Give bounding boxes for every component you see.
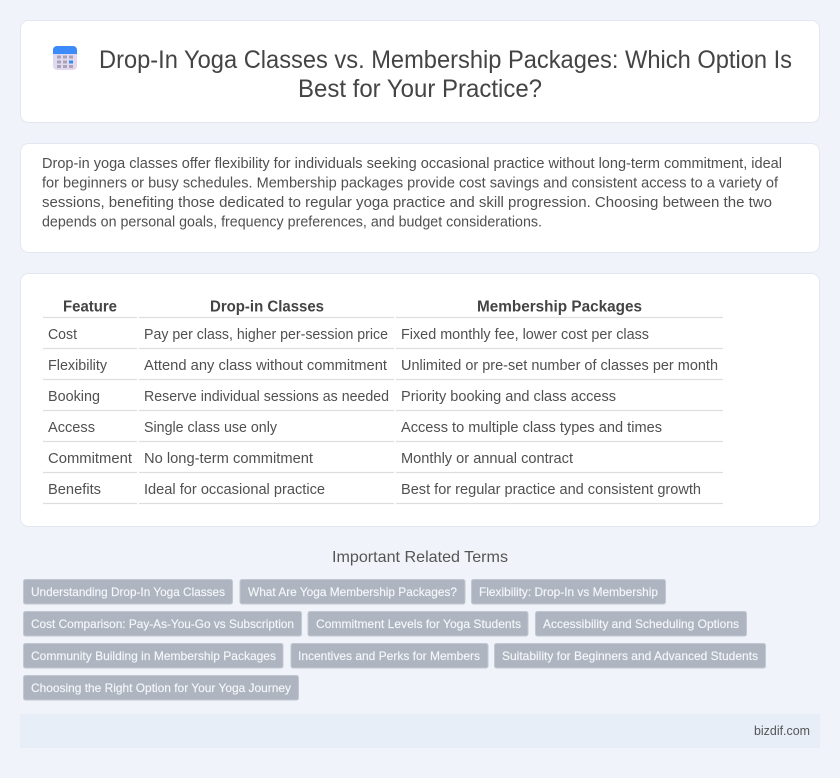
tag: Cost Comparison: Pay-As-You-Go vs Subscription [31,617,294,631]
row: commitment: Monthly or annual contract [401,451,573,467]
tag [24,676,298,700]
tag: Incentives and Perks for Members [298,649,480,663]
paragraph text: depends on personal goals, frequency preferences, and budget considerations. [42,214,542,230]
tag: Understanding Drop-In Yoga Classes [31,585,225,599]
row: benefits: Ideal for occasional practice [144,482,325,498]
row: cost [48,327,649,343]
tag: Flexibility: Drop-In vs Membership [479,585,658,599]
tag [240,580,465,604]
table header: Feature [63,298,117,316]
title text: Drop-In Yoga Classes vs. Membership Packages: Which Option Is [99,46,792,74]
table header [63,298,642,316]
paragraph text: sessions, benefiting those dedicated to regular yoga practice and skill progression. Choosing between the two [42,195,772,211]
paragraph text: Drop-in yoga classes offer flexibility for individuals seeking occasional practice without long-term commitment, ideal [42,156,782,172]
panel: comparison table [20,274,820,526]
row: benefits [48,482,701,498]
tag [494,644,766,668]
tag [291,644,488,668]
tag [24,580,232,604]
row: booking: Reserve individual sessions as needed [144,389,389,405]
tag [24,612,302,636]
row: access: Access to multiple class types and times [401,420,662,436]
row: cost: Fixed monthly fee, lower cost per class [401,327,649,343]
table header: Membership Packages [477,298,642,316]
footer bar [20,714,820,748]
tag [24,644,283,668]
row: commitment: No long-term commitment [144,451,313,467]
row: commitment [48,451,573,467]
tag [472,580,666,604]
row: booking: Priority booking and class access [401,389,616,405]
paragraph text: for beginners or busy schedules. Membership packages provide cost savings and consistent access to a variety of [42,176,779,192]
paragraph text [42,156,782,230]
row: access [48,420,662,436]
row: cost: Cost [48,327,77,343]
tag: Accessibility and Scheduling Options [543,617,739,631]
tag [536,612,746,636]
row: access: Access [48,420,95,436]
tag: Choosing the Right Option for Your Yoga Journey [31,681,291,695]
row: booking: Booking [48,389,100,405]
footer credit: bizdif.com [754,723,810,738]
row: flexibility: Unlimited or pre-set number of classes per month [401,358,718,374]
row: flexibility: Flexibility [48,358,108,374]
row: commitment: Commitment [48,451,132,467]
table header: Drop-in Classes [210,298,324,316]
tag: What Are Yoga Membership Packages? [248,585,457,599]
row: benefits: Best for regular practice and consistent growth [401,482,701,498]
related terms tags [24,580,766,700]
icon: calendar [53,46,77,70]
panel: intro paragraph [20,144,820,252]
tag: Commitment Levels for Yoga Students [316,617,521,631]
row: cost: Pay per class, higher per-session price [144,327,388,343]
tag: Community Building in Membership Packages [31,649,276,663]
heading: important related terms: Important Related Terms [332,549,508,566]
row: flexibility [48,358,718,374]
title text [99,46,792,103]
title text: Best for Your Practice? [298,75,542,103]
panel: title header [20,20,820,122]
row: booking [48,389,616,405]
row: flexibility: Attend any class without commitment [144,358,387,374]
tag [308,612,528,636]
row: benefits: Benefits [48,482,101,498]
tag: Suitability for Beginners and Advanced Students [502,649,758,663]
row: access: Single class use only [144,420,278,436]
